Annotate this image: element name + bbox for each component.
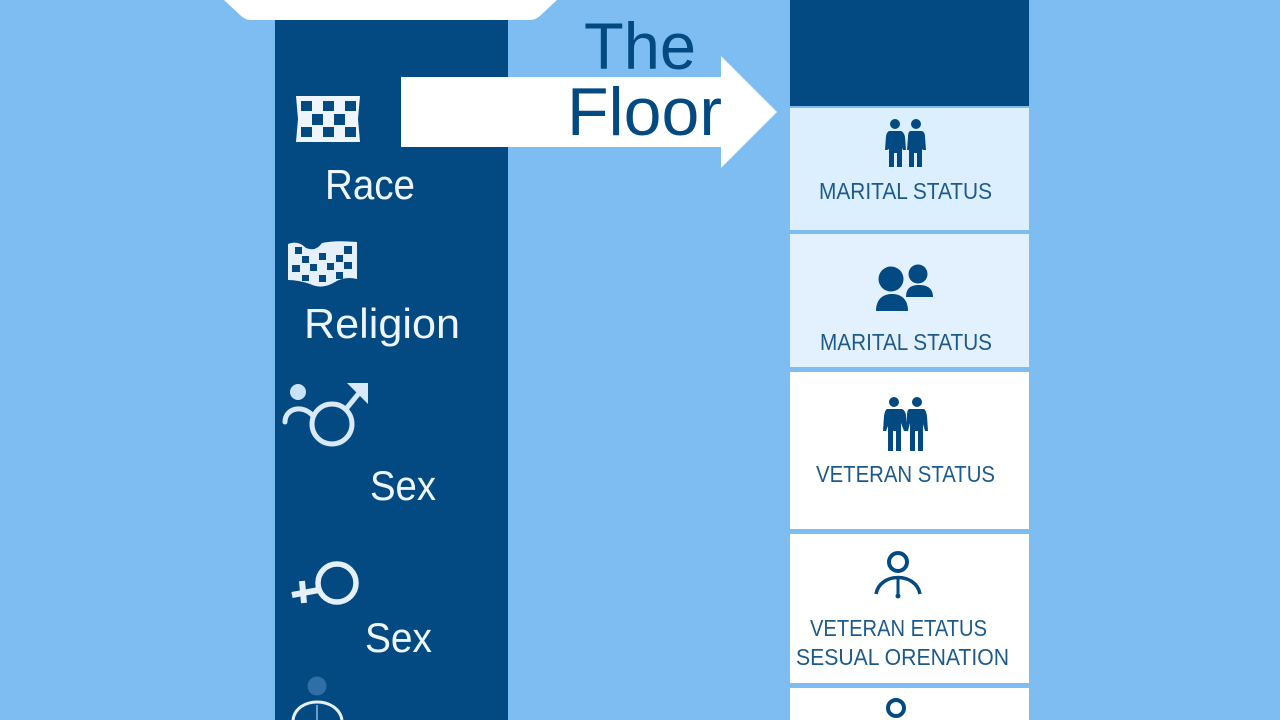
- label: Religion: Religion: [304, 300, 460, 347]
- panel background: [790, 372, 1029, 529]
- panel: marital status 1: [790, 108, 1029, 230]
- left panel background: [275, 20, 508, 720]
- icon: waving checkered flag, religion: [288, 241, 357, 287]
- right column: additional protections: [790, 0, 1029, 720]
- panel: marital status 2: [790, 234, 1029, 367]
- label: veteran status: VETERAN STATUS: [816, 461, 995, 487]
- arrow: points to the right column: [401, 56, 777, 168]
- icon: two people holding hands: [883, 397, 928, 451]
- sex item 1: [285, 383, 436, 509]
- label: Sex: Sex: [370, 462, 436, 509]
- panel background: [790, 108, 1029, 230]
- panel: veteran status: [790, 372, 1029, 529]
- icon: two people: [885, 119, 926, 167]
- panel: veteran status and orientation: [790, 534, 1029, 683]
- religion item: [288, 241, 460, 347]
- sex item 2: [292, 564, 432, 661]
- top white banner: [224, 0, 557, 20]
- right column header: [790, 0, 1029, 106]
- label: sesual orenation: SESUAL ORENATION: [796, 644, 1009, 670]
- icon: two user silhouettes: [876, 264, 933, 311]
- icon: cropped person: [293, 676, 342, 720]
- label: Race: Race: [325, 161, 415, 208]
- panel background: [790, 534, 1029, 683]
- label: marital status: MARITAL STATUS: [819, 178, 992, 204]
- icon: male symbol with figure: [285, 383, 368, 444]
- title line: Floor: Floor: [567, 74, 722, 150]
- icon: female symbol rotated: [292, 564, 356, 603]
- icon: ring head: [888, 700, 904, 716]
- label: Sex: Sex: [365, 614, 432, 661]
- icon: checkered flag, race: [296, 96, 360, 142]
- title: The Floor: [567, 9, 722, 150]
- panel: cropped bottom: [790, 688, 1029, 720]
- title line: The: The: [584, 9, 696, 83]
- panel background: [790, 234, 1029, 367]
- icon: abstract person: [876, 553, 920, 598]
- label: veteran etatus: VETERAN ETATUS: [810, 615, 987, 641]
- label: marital status: MARITAL STATUS: [820, 329, 992, 355]
- panel background: [790, 688, 1029, 720]
- left panel: protected classes: [275, 20, 508, 720]
- race item: [296, 96, 415, 208]
